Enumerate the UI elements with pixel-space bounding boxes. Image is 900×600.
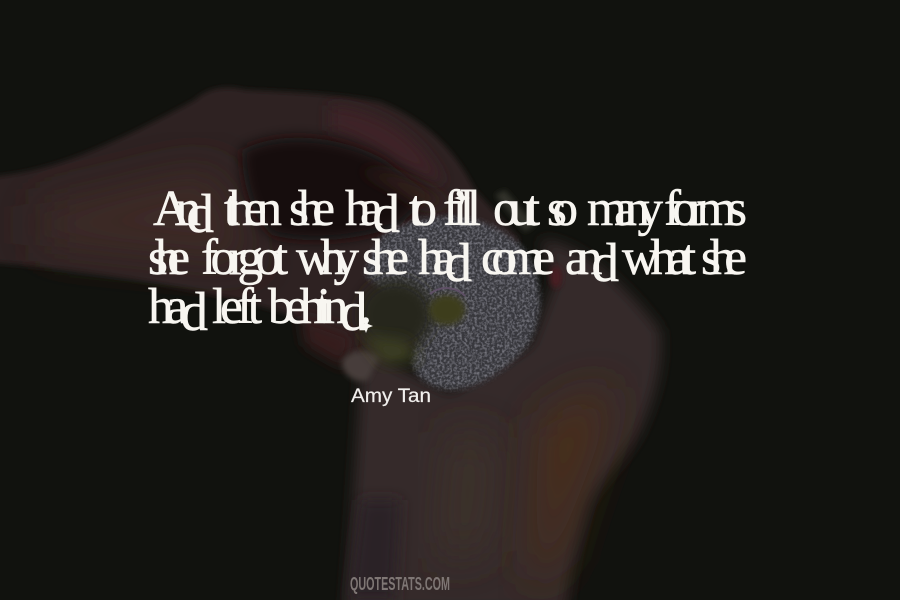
line 2: forgot bbox=[201, 230, 288, 286]
gap between thumb and fingers bbox=[242, 138, 430, 240]
watermark: QUOTESTATS.COM bbox=[350, 574, 450, 594]
line 1: then bbox=[224, 181, 282, 237]
line 2: what bbox=[622, 230, 696, 286]
line 1: she bbox=[289, 181, 335, 237]
line 3 bbox=[148, 279, 372, 342]
dark hollow in the stone bbox=[358, 279, 434, 351]
line 2: ha bbox=[418, 230, 455, 286]
line 2: come bbox=[481, 230, 555, 286]
line 2 bbox=[148, 230, 747, 293]
stone bbox=[342, 190, 562, 389]
line 1: fill bbox=[443, 181, 481, 237]
line 1: many bbox=[587, 181, 664, 237]
line 3: ha bbox=[148, 279, 188, 335]
author name: Amy Tan bbox=[351, 386, 431, 407]
line 1: to bbox=[409, 181, 437, 237]
line 2: d bbox=[592, 232, 619, 293]
red shade on the lower palm bbox=[300, 315, 355, 368]
line 1: ha bbox=[345, 181, 383, 237]
line 2: why bbox=[296, 230, 360, 286]
sparkle accents bbox=[313, 190, 470, 333]
line 3: . bbox=[359, 279, 372, 335]
line 1: forms bbox=[664, 181, 747, 237]
green centre bbox=[429, 295, 465, 325]
line 2: an bbox=[565, 230, 602, 286]
line 1: so bbox=[547, 181, 578, 237]
line 2: she bbox=[362, 230, 409, 286]
line 1: out bbox=[493, 181, 540, 237]
brown stem by the stone rim bbox=[495, 190, 535, 232]
line 3: d bbox=[180, 281, 208, 342]
left hand bbox=[0, 88, 520, 368]
line 2: d bbox=[444, 232, 472, 293]
line 3: behin bbox=[268, 279, 348, 335]
line 1: d bbox=[372, 183, 400, 244]
line 1 bbox=[153, 181, 747, 244]
line 3: left bbox=[212, 279, 262, 335]
red fingertip mark bbox=[550, 266, 562, 288]
fingertip and green glow bbox=[342, 351, 380, 381]
line 2: she bbox=[701, 230, 747, 286]
line 3: d bbox=[340, 281, 368, 342]
line 1: d bbox=[186, 183, 214, 244]
line 1: An bbox=[153, 181, 201, 237]
line 2: she bbox=[148, 230, 190, 286]
right hand bbox=[345, 240, 661, 600]
quote text bbox=[148, 181, 747, 342]
